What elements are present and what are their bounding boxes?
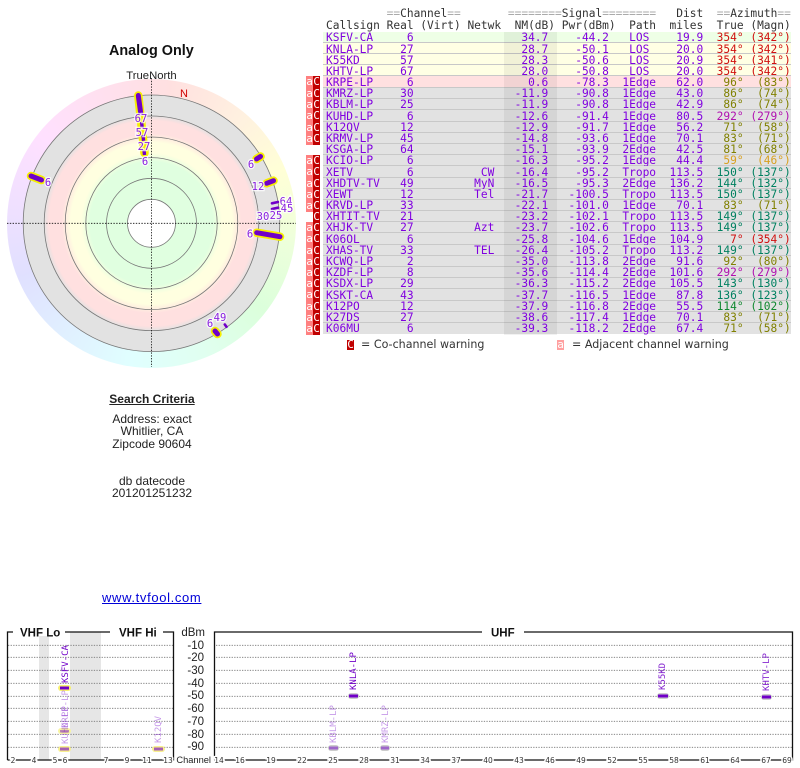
channel warning flags: C <box>313 109 320 122</box>
dBm axis: -60 <box>187 703 204 715</box>
adjacent legend text: = Adjacent channel warning <box>572 338 729 351</box>
polar azimuth chart <box>7 70 296 368</box>
row: KCWQ-LP: KCWQ-LP 2 -35.0 -113.8 2Edge 91.6 92° (80°) <box>326 255 791 268</box>
channel warning flags: C <box>313 199 320 212</box>
chart frames <box>8 632 792 760</box>
row: KRPE-LP: KRPE-LP 6 0.6 -78.3 1Edge 62.0 96° (83°) <box>326 76 791 89</box>
row: K27DS: K27DS 27 -38.6 -117.4 1Edge 70.1 83° (71°) <box>326 311 791 324</box>
station labels: KMRZ-LP <box>381 704 391 743</box>
station channel labels: 27 <box>138 141 150 153</box>
legend: co-channel warning <box>347 338 484 351</box>
channel warning flags: C <box>313 266 320 279</box>
channel warning flags: a <box>306 288 313 301</box>
channel warning flags: a <box>306 75 313 88</box>
row: K06OL: K06OL 6 -25.8 -104.6 1Edge 104.9 7° (354°) <box>326 233 791 246</box>
address text <box>112 412 192 451</box>
dBm axis: -50 <box>187 690 204 702</box>
row: KNLA-LP: KNLA-LP 27 28.7 -50.1 LOS 20.0 354° (342°) <box>326 43 791 56</box>
signal halos <box>58 685 772 752</box>
address text: Address: exact <box>112 412 192 426</box>
co-channel swatch: C <box>347 338 354 351</box>
database datecode <box>112 474 192 500</box>
station channel labels: 57 <box>136 127 148 139</box>
website link: www.tvfool.com <box>102 590 201 605</box>
title: Analog Only <box>109 43 194 59</box>
channel warning flags: a <box>306 165 313 178</box>
channel warning flags: C <box>313 188 320 201</box>
station channel labels: 30 <box>257 211 269 223</box>
header line: group titles: ==Channel== ========Signal======== Dist ==Azimuth== <box>387 7 791 20</box>
channel tick labels <box>11 756 792 765</box>
station labels: K55KD <box>658 663 668 690</box>
channel tick labels: 28 <box>359 756 369 765</box>
address text: Whitlier, CA <box>121 424 183 438</box>
dBm axis: -30 <box>187 665 204 677</box>
channel tick labels: 11 <box>142 756 152 765</box>
dBm axis <box>176 627 211 765</box>
row: KRMV-LP: KRMV-LP 45 -14.8 -93.6 1Edge 70.1 83° (71°) <box>326 132 791 145</box>
channel warning flags: C <box>313 98 320 111</box>
row: XHJK-TV: XHJK-TV 27 Azt -23.7 -102.6 Tropo 113.5 149° (137°) <box>326 221 791 234</box>
search criteria block <box>109 392 195 500</box>
station labels: KUHD-LP <box>61 705 71 744</box>
channel warning flags: C <box>313 288 320 301</box>
channel tick labels: 52 <box>607 756 617 765</box>
dBm axis: -20 <box>187 652 204 664</box>
channel warning flags: C <box>313 121 320 134</box>
station channel labels: 12 <box>252 181 264 193</box>
station channel labels: 6 <box>248 159 254 171</box>
channel warning flags: C <box>313 244 320 257</box>
channel warning flags: a <box>306 232 313 245</box>
channel warning flags: C <box>313 210 320 223</box>
dBm axis: -40 <box>187 678 204 690</box>
channel warning flags: a <box>306 277 313 290</box>
signal strength by channel chart <box>6 627 794 765</box>
station channel labels: 6 <box>247 228 253 240</box>
channel warning flags: C <box>313 75 320 88</box>
station channel labels: 6 <box>45 177 51 189</box>
station labels: KNLA-LP <box>349 651 359 690</box>
channel tick labels: 13 <box>163 756 173 765</box>
channel tick labels: 64 <box>730 756 740 765</box>
channel tick labels: 55 <box>638 756 648 765</box>
channel warning flags: a <box>306 244 313 257</box>
channel tick labels: 7 <box>104 756 109 765</box>
channel tick labels: 43 <box>514 756 524 765</box>
channel warning flags: a <box>306 154 313 167</box>
row: KSGA-LP: KSGA-LP 64 -15.1 -93.9 2Edge 42.5 81° (68°) <box>326 143 791 156</box>
channel tick labels: 2 <box>11 756 16 765</box>
row: XETV: XETV 6 CW -16.4 -95.2 Tropo 113.5 150° (137°) <box>326 166 791 179</box>
channel warning flags: C <box>313 165 320 178</box>
row: XHDTV-TV: XHDTV-TV 49 MyN -16.5 -95.3 2Edge 136.2 144° (132°) <box>326 177 791 190</box>
row: KBLM-LP: KBLM-LP 25 -11.9 -90.8 1Edge 42.9 86° (74°) <box>326 98 791 111</box>
address text: Zipcode 90604 <box>112 437 192 451</box>
band title: UHF: UHF <box>491 628 515 640</box>
dBm axis: -10 <box>187 640 204 652</box>
row: XHTIT-TV: XHTIT-TV 21 -23.2 -102.1 Tropo 113.5 149° (137°) <box>326 210 791 223</box>
channel warning flags: a <box>306 221 313 234</box>
channel tick labels: 58 <box>669 756 679 765</box>
station labels: KRPE-LP <box>61 689 71 728</box>
gridlines <box>8 645 792 747</box>
channel warning flags: a <box>306 322 313 335</box>
channel warning flags: C <box>313 311 320 324</box>
label: TrueNorth: TrueNorth <box>126 70 177 82</box>
label: magnetic north: N <box>180 88 188 100</box>
channel tick labels: 4 <box>32 756 37 765</box>
channel tick labels: 22 <box>297 756 307 765</box>
row: KCIO-LP: KCIO-LP 6 -16.3 -95.2 1Edge 44.4 59° (46°) <box>326 154 791 167</box>
row: XEWT: XEWT 12 Tel -21.7 -100.5 Tropo 113.5 150° (137°) <box>326 188 791 201</box>
channel tick labels: 16 <box>235 756 245 765</box>
station channel labels: 45 <box>281 203 293 215</box>
row: XHAS-TV: XHAS-TV 33 TEL -26.4 -105.2 Tropo 113.2 149° (137°) <box>326 244 791 257</box>
band title: VHF Lo: VHF Lo <box>20 628 60 640</box>
dBm axis: dBm <box>181 627 205 639</box>
station channel labels: 6 <box>142 156 148 168</box>
channel tick labels: 14 <box>214 756 224 765</box>
station channel labels: 67 <box>135 113 147 125</box>
database datecode: 201201251232 <box>112 486 192 500</box>
row: KZDF-LP: KZDF-LP 8 -35.6 -114.4 2Edge 101.6 292° (279°) <box>326 266 791 279</box>
dBm axis: -80 <box>187 729 204 741</box>
channel warning flags: C <box>313 221 320 234</box>
channel warning flags: a <box>306 266 313 279</box>
row: KMRZ-LP: KMRZ-LP 30 -11.9 -90.8 1Edge 43.0 86° (74°) <box>326 87 791 100</box>
channel warning flags: a <box>306 311 313 324</box>
channel warning flags: a <box>306 109 313 122</box>
channel warning flags: a <box>306 98 313 111</box>
channel warning flags: a <box>306 87 313 100</box>
channel warning flags: C <box>313 132 320 145</box>
station labels: K12QV <box>154 715 164 743</box>
channel warning flags: a <box>306 177 313 190</box>
channel warning flags: a <box>306 121 313 134</box>
table header <box>326 7 791 32</box>
row: KHTV-LP: KHTV-LP 67 28.0 -50.8 LOS 20.0 354° (342°) <box>326 65 791 78</box>
row: KRVD-LP: KRVD-LP 33 -22.1 -101.0 1Edge 70.1 83° (71°) <box>326 199 791 212</box>
dBm axis: -90 <box>187 741 204 753</box>
channel warning flags: C <box>313 87 320 100</box>
channel warning flags: C <box>313 177 320 190</box>
station labels: KBLM-LP <box>329 704 339 743</box>
channel warning flags: C <box>313 277 320 290</box>
row: K06MU: K06MU 6 -39.3 -118.2 2Edge 67.4 71° (58°) <box>326 322 791 335</box>
channel warning flags: C <box>313 300 320 313</box>
channel warning flags: C <box>313 154 320 167</box>
station channel labels: 6 <box>207 318 213 330</box>
row: KSDX-LP: KSDX-LP 29 -36.3 -115.2 2Edge 105.5 143° (130°) <box>326 277 791 290</box>
station channel labels: 25 <box>270 210 282 222</box>
channel warning flags: C <box>313 255 320 268</box>
station labels <box>61 644 772 744</box>
channel warning flags <box>306 75 320 335</box>
channel tick labels: 37 <box>451 756 461 765</box>
polar chart drawing <box>7 70 296 367</box>
station channel labels <box>45 113 293 330</box>
channel warning flags: a <box>306 199 313 212</box>
adjacent swatch: a <box>557 338 564 351</box>
row: KUHD-LP: KUHD-LP 6 -12.6 -91.4 1Edge 80.5 292° (279°) <box>326 110 791 123</box>
channel warning flags: a <box>306 300 313 313</box>
channel tick labels: 5 <box>53 756 58 765</box>
channel tick labels: 6 <box>63 756 68 765</box>
channel warning flags: a <box>306 132 313 145</box>
dBm axis: Channel <box>176 755 211 765</box>
search criteria heading: Search Criteria <box>109 392 195 406</box>
station channel labels: 49 <box>214 312 226 324</box>
dBm axis: -70 <box>187 716 204 728</box>
legend: adjacent channel warning <box>557 338 729 351</box>
channel tick labels: 9 <box>125 756 130 765</box>
signal bars <box>60 686 771 750</box>
row: KSKT-CA: KSKT-CA 43 -37.7 -116.5 1Edge 87.8 136° (123°) <box>326 289 791 302</box>
channel tick labels: 34 <box>420 756 430 765</box>
row: K12PO: K12PO 12 -37.9 -116.8 2Edge 55.5 114° (102°) <box>326 300 791 313</box>
channel tick labels: 40 <box>483 756 493 765</box>
channel warning flags: C <box>313 232 320 245</box>
channel warning flags: C <box>313 322 320 335</box>
channel warning flags: a <box>306 188 313 201</box>
channel tick labels: 61 <box>700 756 710 765</box>
co-channel legend text: = Co-channel warning <box>361 338 484 351</box>
VHF channel shading <box>39 632 101 760</box>
station labels: KHTV-LP <box>762 652 772 691</box>
station labels: KSFV-CA <box>61 644 71 683</box>
row: KSFV-CA: KSFV-CA 6 34.7 -44.2 LOS 19.9 354° (342°) <box>326 31 791 44</box>
channel tick labels: 67 <box>761 756 771 765</box>
header line: column titles: Callsign Real (Virt) Netwk NM(dB) Pwr(dBm) Path miles True (Magn) <box>326 19 791 32</box>
station markers <box>31 96 280 334</box>
channel warning flags: a <box>306 255 313 268</box>
band title: VHF Hi: VHF Hi <box>119 628 157 640</box>
row: K55KD: K55KD 57 28.3 -50.6 LOS 20.9 354° (341°) <box>326 54 791 67</box>
station channel labels: 64 <box>280 196 292 208</box>
row: K12QV: K12QV 12 -12.9 -91.7 1Edge 56.2 71° (58°) <box>326 121 791 134</box>
channel tick labels: 46 <box>545 756 555 765</box>
station table <box>323 31 791 335</box>
channel tick labels: 69 <box>782 756 792 765</box>
channel tick labels: 19 <box>266 756 276 765</box>
database datecode: db datecode <box>119 474 185 488</box>
channel tick labels: 25 <box>328 756 338 765</box>
channel tick labels: 49 <box>576 756 586 765</box>
compass hue wheel <box>7 79 296 368</box>
channel tick labels: 31 <box>390 756 400 765</box>
